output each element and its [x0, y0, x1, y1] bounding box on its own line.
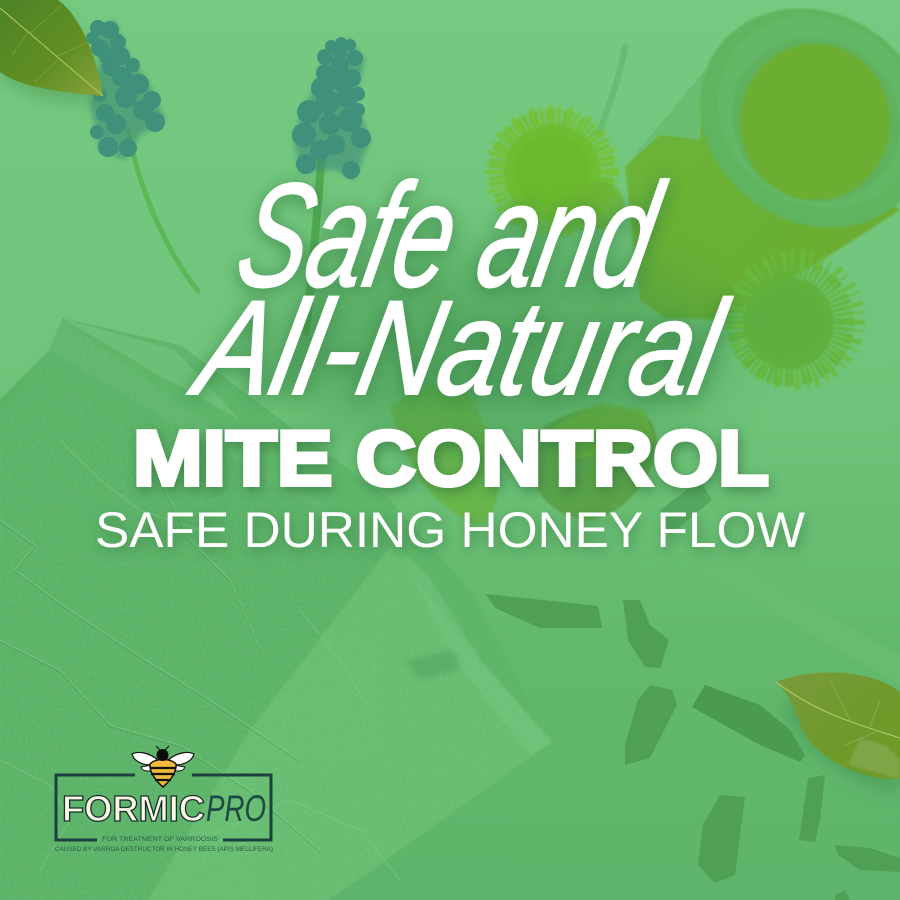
bottle — [625, 0, 900, 320]
icon: dandelion top — [494, 114, 624, 230]
subheading: safe during honey flow: SAFE DURING HONEY FLOW — [95, 501, 805, 558]
wood chips — [486, 594, 900, 900]
title: script headline — [180, 152, 739, 423]
logo frame — [56, 775, 271, 840]
icon: top-left leaf — [0, 0, 103, 104]
headline line: Safe and: Safe and — [225, 152, 675, 318]
logo indication: CAUSED BY VARROA DESTRUCTOR IN HONEY BEES (APIS MELLIFERA) — [55, 846, 273, 853]
logo wordmark PRO: PRO — [206, 788, 266, 829]
icon: dandelion lower right — [735, 260, 855, 380]
faint stem — [598, 47, 625, 135]
icon: grape hyacinth centre — [292, 37, 371, 332]
wood chip small — [799, 775, 825, 842]
heading: MITE CONTROL: MITE CONTROL — [133, 414, 769, 502]
wood chip right — [835, 845, 900, 872]
wood chip striped — [692, 685, 805, 762]
wood chip corner — [835, 890, 850, 900]
logo wordmark FORMIC: FORMIC — [62, 788, 205, 829]
wood chip middle — [625, 685, 677, 765]
wood chip lower — [698, 795, 745, 883]
icon: bottom-right leaf — [776, 673, 900, 792]
wood chip upper — [623, 600, 669, 668]
icon: lower-centre leaf behind text — [390, 385, 498, 525]
logo: Formic Pro — [55, 746, 273, 853]
cloth wrap — [0, 318, 552, 900]
icon: bee — [132, 746, 194, 787]
headline line: All-Natural: All-Natural — [180, 273, 739, 423]
logo tagline: FOR TREATMENT OF VARROOSIS — [102, 836, 219, 843]
icon: grape hyacinth left — [86, 20, 198, 291]
shadow behind headline — [270, 250, 730, 450]
honey dipper — [528, 403, 900, 685]
wood chip long — [486, 594, 602, 628]
